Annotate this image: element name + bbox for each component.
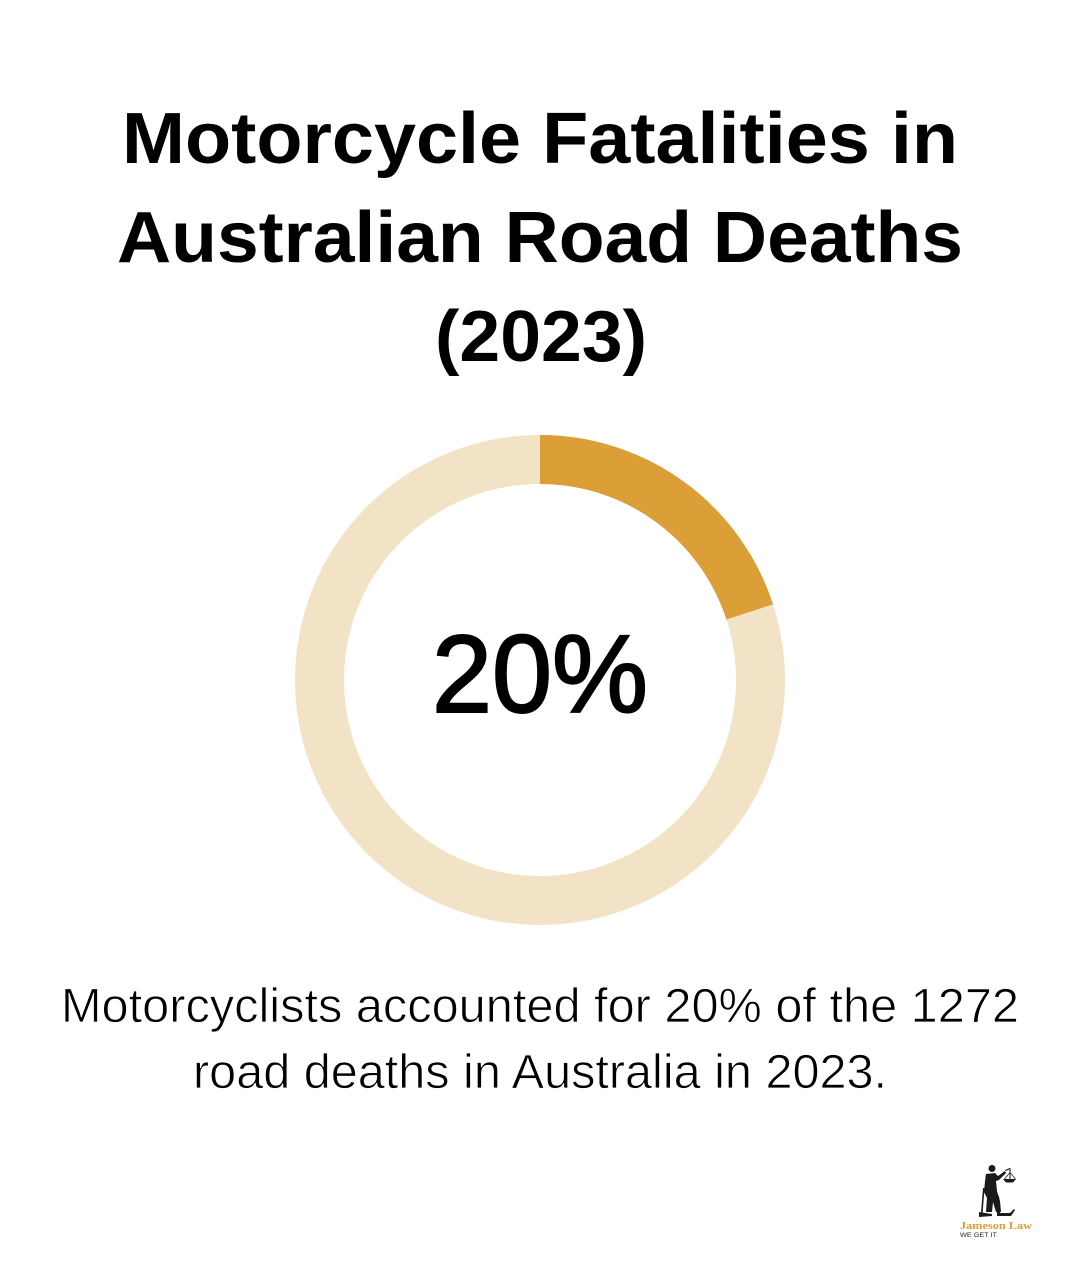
logo wordmark: Jameson Law (960, 1221, 1032, 1232)
title (117, 99, 963, 377)
logo tagline: WE GET IT (960, 1232, 997, 1239)
title: Motorcycle Fatalities in (122, 99, 958, 179)
description text: road deaths in Australia in 2023. (193, 1046, 887, 1099)
center value: 20% (432, 613, 648, 736)
title: (2023) (435, 297, 647, 377)
donut chart: 20% share (320, 460, 760, 900)
title: Australian Road Deaths (117, 198, 963, 278)
donut track (320, 460, 760, 900)
description text: Motorcyclists accounted for 20% of the 1272 (61, 980, 1019, 1033)
icon: lady justice (979, 1165, 1016, 1217)
donut segment: 20% (540, 460, 750, 612)
description text (61, 980, 1019, 1099)
logo: Jameson Law (960, 1165, 1032, 1239)
